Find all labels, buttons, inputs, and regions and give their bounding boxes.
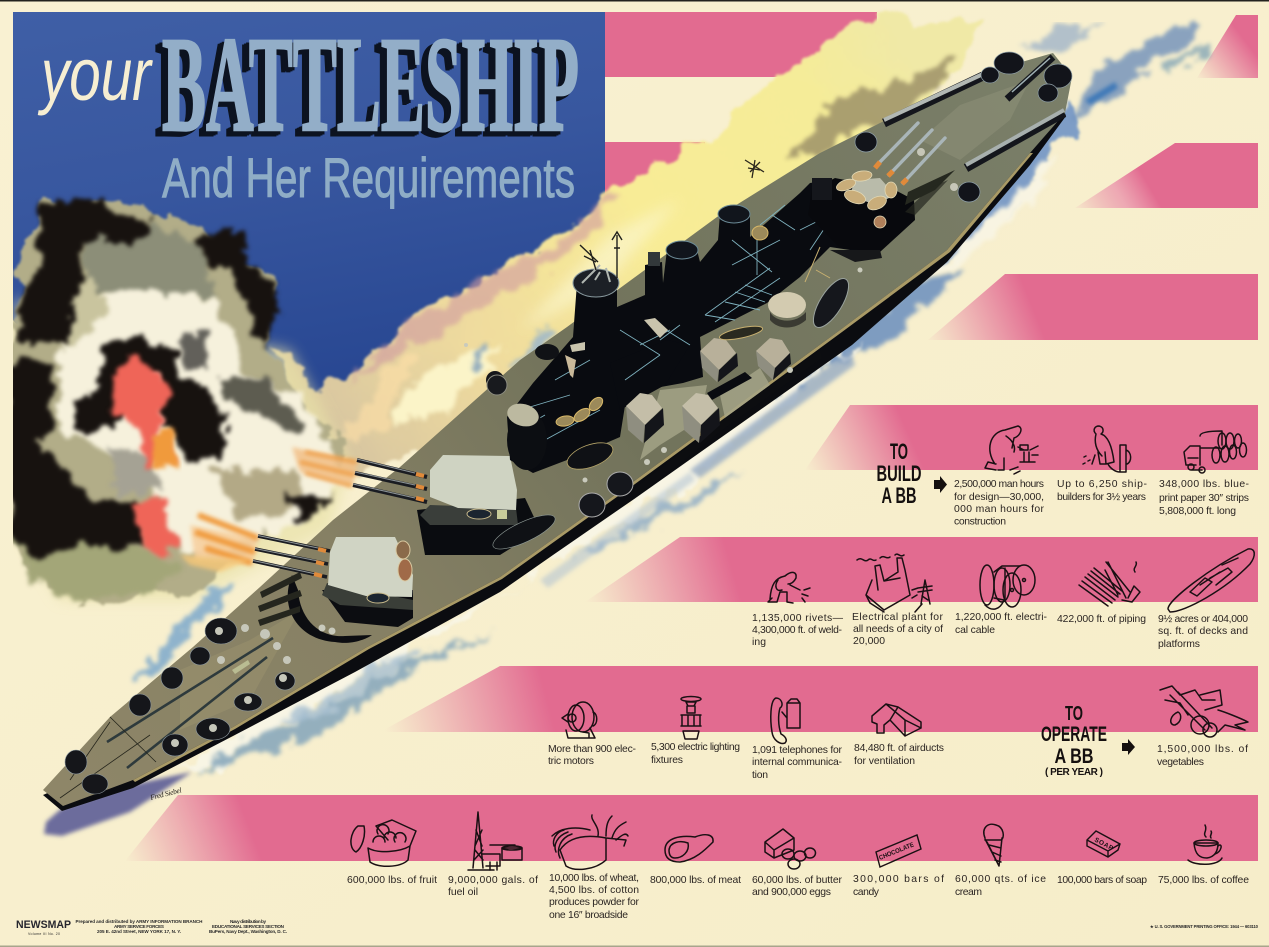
text: candy: 300,000 bars of xyxy=(853,874,944,885)
footer: navy credit xyxy=(209,919,287,934)
text: vegetables xyxy=(1157,744,1248,768)
subtitle: And Her Requirements xyxy=(162,146,575,209)
icon: fruit bowl xyxy=(351,820,416,866)
word: BATTLESHIP xyxy=(155,10,579,165)
icon: ice cream cone xyxy=(984,824,1003,866)
footer: newsmap logo: Volume III No. 20 xyxy=(28,932,60,936)
catwalk light lines xyxy=(510,205,870,440)
text: lighting xyxy=(651,742,740,766)
icon: air ducts xyxy=(872,704,921,736)
text: decks xyxy=(1158,614,1248,650)
secondary gun houses xyxy=(626,292,806,443)
footer: army credit: 205 E. 42nd Street, NEW YORK 17, N. Y. xyxy=(97,929,181,934)
text: meat: 800,000 lbs. of meat xyxy=(650,875,741,886)
text: blueprint paper: 348,000 lbs. blue- xyxy=(1159,479,1249,490)
footer: army credit: ARMY SERVICE FORCES xyxy=(114,924,164,929)
black smoke clumps xyxy=(8,198,332,560)
text: shipbuilders: Up to 6,250 ship- xyxy=(1057,479,1147,490)
text: rivets: 1,135,000 rivets— xyxy=(752,613,844,624)
text: decks: platforms xyxy=(1158,639,1200,650)
text: ice cream: 60,000 qts. of ice xyxy=(955,874,1046,885)
text: cable xyxy=(955,612,1047,636)
text: fuel oil: 9,000,000 gals. of xyxy=(448,875,538,886)
text: electrical plant xyxy=(852,612,944,647)
text: telephones xyxy=(752,745,843,781)
text: fuel oil: fuel oil xyxy=(448,887,478,898)
hull side xyxy=(43,100,1066,811)
text: candy xyxy=(853,874,944,898)
section heading: to build a BB: BUILD xyxy=(876,461,922,486)
text: telephones: 1,091 telephones for xyxy=(752,745,843,756)
text: airducts xyxy=(854,743,944,767)
aft superstructure and turret 3 xyxy=(805,123,955,282)
explosion smoke cloud xyxy=(8,198,350,602)
text: airducts: 84,480 ft. of airducts xyxy=(854,743,944,754)
text: shipbuilders xyxy=(1057,479,1147,503)
title xyxy=(37,10,579,209)
footer: navy credit: Navy distribution by xyxy=(230,919,266,924)
icon: soap: SOAP xyxy=(1093,837,1115,852)
section heading: to operate: OPERATE xyxy=(1041,723,1107,746)
section heading: to build a BB: A BB xyxy=(882,483,916,508)
text: lighting: fixtures xyxy=(651,755,683,766)
forward barbette arc and turret 1 xyxy=(258,537,413,643)
text: BATTLESHIP xyxy=(155,15,572,165)
icon: welding rivets xyxy=(768,572,810,603)
text: wheat and cotton xyxy=(549,873,640,921)
text: man hours: 2,500,000 man hours xyxy=(954,479,1044,490)
text: man hours: for design—30,000, xyxy=(954,492,1044,503)
text: decks: sq. ft. of decks and xyxy=(1158,626,1248,637)
text: motors: More than 900 elec- xyxy=(548,744,636,755)
icon: electric motor xyxy=(562,702,597,738)
icon: piping xyxy=(1079,562,1140,606)
icon: chocolate bar: CHOCOLATE xyxy=(878,841,916,862)
text: electrical plant: Electrical plant for xyxy=(852,612,944,623)
text: ice cream xyxy=(955,874,1046,898)
text: soap: 100,000 bars of soap xyxy=(1057,875,1147,886)
text: motors xyxy=(548,744,636,767)
muzzle flames xyxy=(180,447,357,572)
blue canton xyxy=(13,12,605,430)
text: fruit: 600,000 lbs. of fruit xyxy=(347,875,437,886)
text: piping: 422,000 ft. of piping xyxy=(1057,614,1146,625)
text: wheat and cotton: 10,000 lbs. of wheat, xyxy=(549,873,639,884)
footer: army credit xyxy=(76,919,203,934)
battleship xyxy=(43,52,1072,811)
yellow gun smoke cloud behind ship xyxy=(275,16,985,470)
text: wheat and cotton: produces powder for xyxy=(549,897,640,908)
turret 2 xyxy=(353,455,559,555)
text: motors: tric motors xyxy=(548,756,594,767)
text: decks: 9½ acres or 404,000 xyxy=(1158,614,1248,625)
text: man hours xyxy=(954,479,1045,528)
icon: cable reels xyxy=(980,565,1035,609)
icon: soap xyxy=(1087,831,1120,857)
text: wheat and cotton: one 16″ broadside xyxy=(549,910,628,921)
text: butter and eggs xyxy=(752,875,843,898)
icon: oil derrick and tanks xyxy=(468,812,522,870)
text: electrical plant: 20,000 xyxy=(853,636,885,647)
text: vegetables: vegetables xyxy=(1157,757,1204,768)
footer: navy credit: BuPers, Navy Dept., Washington, D. C. xyxy=(209,929,287,934)
text: blueprint paper: 5,808,000 ft. long xyxy=(1159,506,1236,517)
text: BATTLESHIP xyxy=(157,14,574,164)
section heading: to operate: TO xyxy=(1065,703,1083,725)
text: BATTLESHIP xyxy=(162,10,579,160)
arrow: operate xyxy=(1122,739,1135,755)
text: rivets: 4,300,000 ft. of weld- xyxy=(752,625,842,636)
icon: welder shipbuilder xyxy=(1083,426,1131,472)
text: BATTLESHIP xyxy=(159,13,576,163)
icon: telephone xyxy=(771,698,800,743)
icon: truck with paper rolls xyxy=(1184,431,1246,473)
footer: newsmap logo: NEWSMAP xyxy=(16,919,71,931)
text: rivets xyxy=(752,613,844,648)
section heading: to operate: A BB xyxy=(1054,745,1094,768)
icon: worker hammering xyxy=(985,426,1038,474)
section heading: to build a BB: TO xyxy=(890,439,908,464)
arrow: build xyxy=(934,476,947,493)
icon: ship deck plan xyxy=(1168,549,1254,612)
text: airducts: for ventilation xyxy=(854,756,915,767)
stern details xyxy=(855,52,1072,202)
text: telephones: internal communica- xyxy=(752,757,842,768)
icon: butter and eggs xyxy=(765,829,816,869)
section heading: to operate xyxy=(1041,703,1107,778)
text: blueprint paper xyxy=(1159,479,1249,517)
main deck xyxy=(43,53,1072,806)
word: your: your xyxy=(37,33,154,116)
main superstructure xyxy=(464,160,913,517)
text: rivets: ing xyxy=(752,637,766,648)
text: fuel oil xyxy=(448,875,538,898)
text: butter and eggs: 60,000 lbs. of butter xyxy=(752,875,843,886)
bow details xyxy=(60,618,295,798)
text: butter and eggs: and 900,000 eggs xyxy=(752,887,831,898)
section heading: to build a BB xyxy=(876,439,922,508)
text: wheat and cotton: 4,500 lbs. of cotton xyxy=(549,885,639,896)
ship wakes xyxy=(44,20,1212,836)
text: vegetables: 1,500,000 lbs. of xyxy=(1157,744,1248,755)
text: blueprint paper: print paper 30″ strips xyxy=(1159,493,1249,504)
text: cable: cal cable xyxy=(955,625,995,636)
text: coffee: 75,000 lbs. of coffee xyxy=(1158,875,1249,886)
text: electrical plant: all needs of a city of xyxy=(853,624,943,635)
text: man hours: construction xyxy=(954,516,1006,528)
icon: electrical plant xyxy=(857,554,932,612)
section heading: to operate: ( PER YEAR ) xyxy=(1045,767,1103,778)
icon: coffee cup xyxy=(1188,825,1222,864)
text: telephones: tion xyxy=(752,770,768,781)
text: shipbuilders: builders for 3½ years xyxy=(1057,492,1146,503)
icon: chocolate bar xyxy=(876,835,921,867)
footer: printing office: ★ U. S. GOVERNMENT PRINTING OFFICE: 1944 — 603110 xyxy=(1149,924,1259,929)
text: ice cream: cream xyxy=(955,887,982,898)
text: candy: candy xyxy=(853,887,880,898)
footer: navy credit: EDUCATIONAL SERVICES SECTION xyxy=(212,924,285,929)
text: lighting: 5,300 electric lighting xyxy=(651,742,740,753)
icon: vegetables xyxy=(1160,686,1248,737)
icon: lighting fixture xyxy=(681,696,701,739)
forward guns xyxy=(253,536,330,577)
footer: newsmap logo xyxy=(16,919,71,936)
footer: army credit: Prepared and distributed by ARMY INFORMATION BRANCH xyxy=(76,919,203,924)
icon: wheat and powder bags xyxy=(552,815,628,869)
text: man hours: 000 man hours for xyxy=(954,504,1045,515)
red fire xyxy=(113,360,172,470)
signature: Fred Siebel xyxy=(148,785,183,802)
icon: meat ham xyxy=(665,835,713,862)
text: cable: 1,220,000 ft. electri- xyxy=(955,612,1047,623)
